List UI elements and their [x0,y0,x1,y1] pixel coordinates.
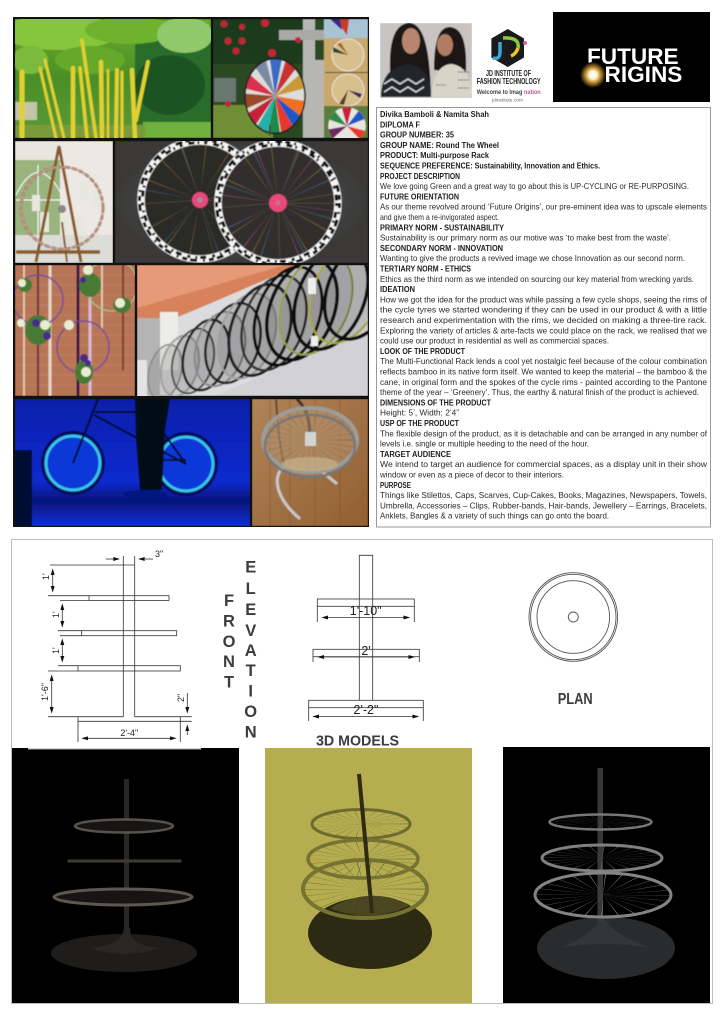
text block: purpose: Umbrella, Accessories – Clips, Rubber-bands, Hair-bands, Jewellery – Earrings, Bracelets, [380,500,707,510]
text block: group details: GROUP NUMBER: 35 [380,130,454,140]
text block: future orientation: and give them a re-invigorated aspect. [380,212,499,222]
wheel with coloured wedges [245,58,305,134]
text block: target audience: window or even as a piece of decor to their interiors. [379,470,564,480]
text block: future orientation: FUTURE ORIENTATION [380,191,459,201]
text block: dimensions of the product: DIMENSIONS OF THE PRODUCT [380,397,492,407]
text block: USP of the product: The flexible design of the product, as it is detachable and can be arranged in any number of [380,428,708,438]
text block: project description: PROJECT DESCRIPTION [380,171,460,181]
dimension labels: 1' [41,573,51,580]
text block: target audience: TARGET AUDIENCE [380,449,451,459]
icon: glowing orb [580,62,606,88]
text block: tertiary norm: TERTIARY NORM - ETHICS [380,264,471,274]
logo: JD Institute of Fashion Technology [477,29,541,102]
heading: FRONT vertical label: N [223,653,235,671]
text block: purpose: Anklets, Bangles & a variety of such things can go onto the board. [380,511,609,521]
text block: ideation [380,284,708,346]
photo: rims arranged in a row along a wall [137,265,368,396]
heading: ELEVATION vertical label: N [245,724,257,742]
text block: ideation: IDEATION [380,284,415,294]
dimension labels: 1' [51,611,61,618]
heading: FRONT vertical label: T [224,674,234,692]
heading: ELEVATION vertical label: L [246,580,256,598]
photo: yellow bamboo grove [15,19,211,138]
text block: USP of the product: levels i.e. single or multiple heeding to the need of the hour. [380,439,589,449]
text block: group details: DIPLOMA F [380,119,420,129]
technical drawing: elevation with shelf widths: 2'-2" [354,703,378,717]
dimension labels: 3" [155,549,163,559]
heading: ELEVATION vertical label: V [245,622,256,640]
text block: ideation: could use our product in residential as well as commercial spaces. [380,336,609,346]
row of rims [143,225,414,403]
rack outline [78,565,180,721]
dimension labels: 1' [51,647,61,654]
heading: ELEVATION vertical label: E [245,601,256,619]
icon: hexagon emblem [491,29,527,67]
heading: FRONT vertical label: R [223,613,235,631]
logo: JD Institute of Fashion Technology: FASHION TECHNOLOGY [477,76,541,86]
heading: ELEVATION vertical label: E [245,559,256,577]
logo: JD Institute of Fashion Technology: JD INSTITUTE OF [486,68,531,78]
text block: purpose: Things like Stilettos, Caps, Scarves, Cup-Cakes, Books, Magazines, Newspapers, Towels, [380,490,707,500]
text block: group details: Divika Bamboli & Namita Shah [380,109,489,119]
3D model: dark brown render [12,748,239,1003]
text block: ideation: research and experimentation with the rims, we decided on making a three-tire rack. [380,315,707,325]
panel: technical drawings and 3D models [12,540,712,1004]
text block: dimensions of the product: Height: 5’, Width: 2’4” [380,408,459,418]
text block: look of the product: cane, in original form and the spokes of the cycle rims - painted according to the Pantone [380,377,707,387]
dimension labels [40,549,186,738]
heading: 3D models: 3D MODELS [316,733,399,750]
text block: USP of the product: USP OF THE PRODUCT [380,418,460,428]
text block: primary norm [380,222,671,243]
3D model: yellow background render [265,748,472,1003]
logo: Future Origins theme: O [585,62,603,87]
panel: inspiration photo collage [0,14,414,527]
technical drawing: elevation with shelf widths: 2' [361,644,371,658]
panel: project description text [376,108,710,527]
text block: look of the product: The Multi-Functional Rack lends a cool yet nostalgic feel because of the colour combination [380,356,707,366]
text block: look of the product: theme of the year – ‘Greenery’. Thus, the earthy & natural finish of the product is achieved. [380,387,699,397]
logo: JD Institute of Fashion Technology: Welcome to Imag nation [477,89,541,96]
text block: group details [380,109,600,170]
text block: target audience [379,449,708,480]
text block: purpose: PURPOSE [380,480,411,490]
left rim [140,140,260,260]
photo: two bicycle rims with animal print tyres and coloured spokes [115,141,368,263]
dimension lines [48,556,192,742]
text block: secondary norm: Wanting to give the products a revived image we chose Innovation as our second norm. [380,253,685,263]
photo: colourful spinning wheel garden art with thumbnails [213,19,368,138]
technical drawing: elevation with shelf widths: 1'-10" [350,604,382,618]
text block: project description: We love going Green and a great way to go about this is UP-CYCLING or RE-PURPOSING. [380,181,689,191]
heading: ELEVATION vertical label [244,559,257,742]
text block: purpose [380,480,707,521]
text block: target audience: We intend to target an audience for commercial spaces, as a display unit in their show [380,459,708,469]
technical drawing: elevation with shelf widths [309,555,423,721]
text block: dimensions of the product [380,397,492,418]
text block: group details: PRODUCT: Multi-purpose Rack [380,150,489,160]
logo: Future Origins theme [553,12,710,102]
photo: wheel on wooden easel seating chart [15,141,113,263]
heading: ELEVATION vertical label: I [248,683,253,701]
photo: bicycle with glowing blue wheels [15,399,250,526]
logo: JD Institute of Fashion Technology: jdinstitute.com [491,98,523,102]
technical drawing: front view with dimensions [28,549,201,749]
right designer [432,27,472,97]
text block: primary norm: Sustainability is our primary norm as our motive was ‘to make best from the waste’. [380,233,671,243]
dimension labels: 2" [176,694,186,702]
heading: FRONT vertical label [223,592,236,692]
text block: tertiary norm: Ethics as the third norm as we intended on sourcing our key material from wrecking yards. [380,274,694,284]
text block: secondary norm [380,243,685,263]
3D model: grey render on black [503,747,710,1003]
technical drawing: plan view circles [529,573,618,661]
text block: ideation: the cycle tyres we started wondering if they can be used in our product & with a little [380,305,707,315]
photo: portrait of the two designers [380,23,472,98]
photo: rim side table on wooden floor [252,399,368,526]
heading: ELEVATION vertical label: T [246,662,256,680]
heading: plan: PLAN [558,691,593,708]
text block: tertiary norm [380,264,694,284]
logo: Future Origins theme: FUTURE [587,44,679,69]
heading: FRONT vertical label: F [224,592,234,610]
text block: group details: GROUP NAME: Round The Wheel [380,140,499,150]
thumbnails [324,19,368,38]
logo: Future Origins theme: RIGINS [604,62,682,87]
heading: ELEVATION vertical label: O [244,703,257,721]
text block: look of the product [380,346,707,397]
dimension labels: 2'-4" [120,728,138,738]
text block: look of the product: LOOK OF THE PRODUCT [380,346,466,356]
heading: ELEVATION vertical label: A [245,642,257,660]
text block: project description [380,171,689,191]
text block: look of the product: reflects bamboo in its native form itself. We wanted to keep the material – the bamboo & the [380,366,707,376]
right rim [216,142,340,264]
text block: ideation: How we got the idea for the product was while passing a few cycle shops, seeing the rims of [380,294,708,304]
text block: primary norm: PRIMARY NORM - SUSTAINABILITY [380,222,504,232]
text block: future orientation [380,191,707,222]
text block: USP of the product [380,418,708,449]
text block: secondary norm: SECONDARY NORM - INNOVATION [380,243,503,253]
left designer [381,23,431,97]
heading: FRONT vertical label: O [223,633,236,651]
photo: hoops with flowers on brick wall [15,265,135,396]
dimension labels: 1'-6" [40,683,50,701]
text block: group details: SEQUENCE PREFERENCE: Sustainability, Innovation and Ethics. [380,160,600,170]
text block: ideation: Exploring the variety of articles & arte-facts we could place on the rack, we realised that we [380,325,707,335]
